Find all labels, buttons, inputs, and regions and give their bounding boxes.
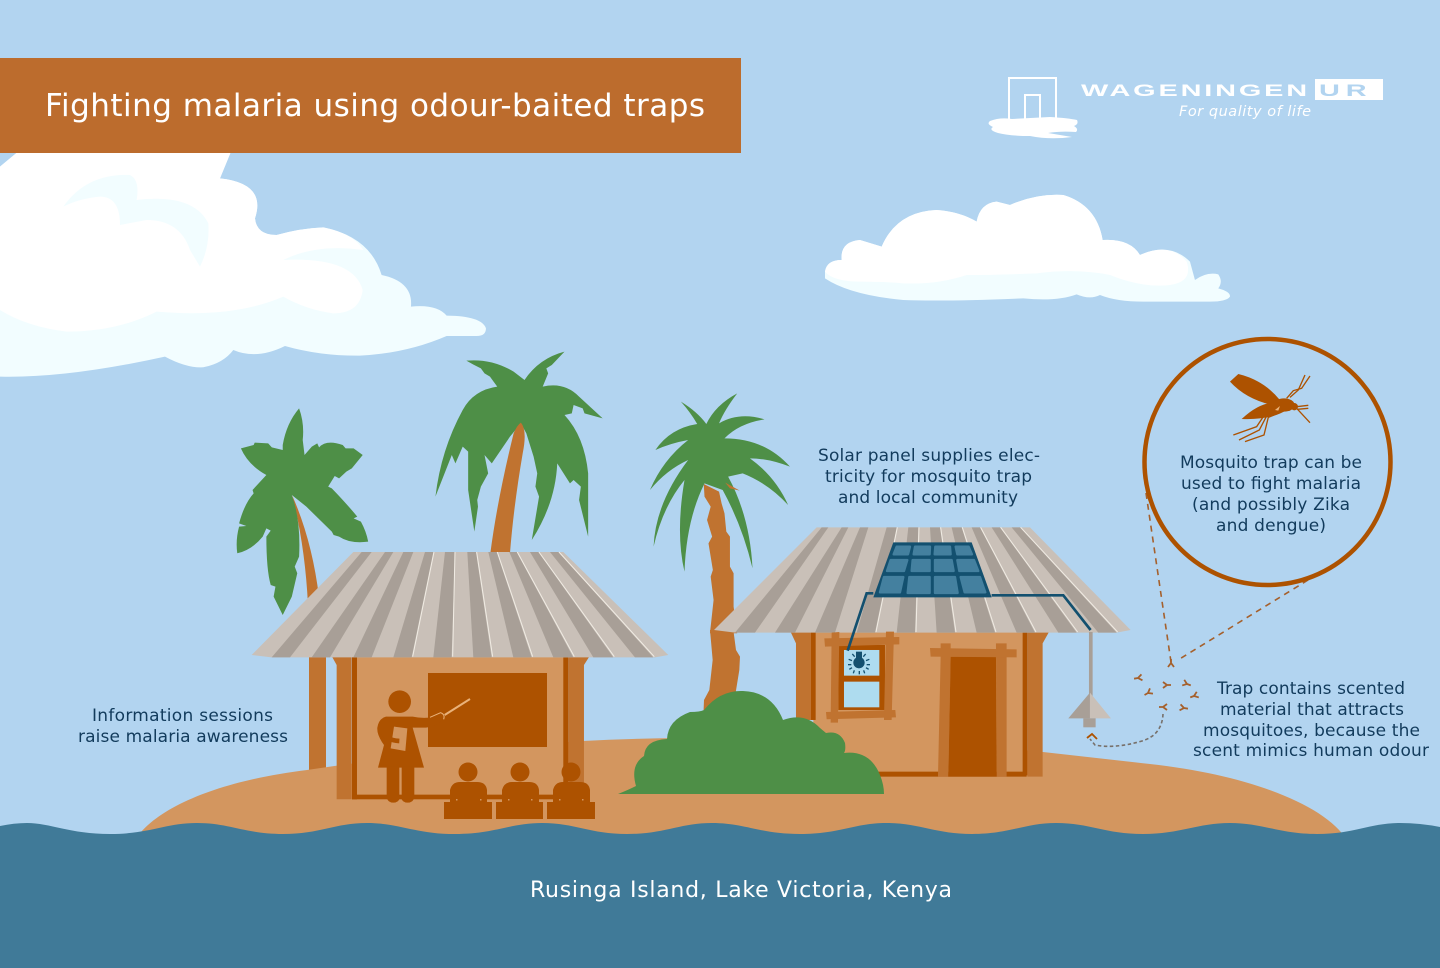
text: solar panel: [818, 446, 1040, 508]
teacher figure: [377, 690, 470, 803]
island: [135, 738, 1347, 840]
hut: solar house: [714, 527, 1131, 777]
text: solar panel: Solar panel supplies elec-: [818, 446, 1040, 466]
water: [0, 823, 1440, 968]
icon: mosquito: [1230, 374, 1310, 442]
palm tree: right: [650, 393, 790, 717]
text: mosquito trap use: [1180, 453, 1362, 536]
logo: Wageningen UR: UR: [1319, 82, 1367, 100]
text: information sessions: [78, 706, 288, 747]
door: [930, 643, 1017, 777]
logo: Wageningen UR: [989, 78, 1383, 138]
small mosquitoes and flight path: [1087, 659, 1199, 746]
blackboard: [428, 673, 547, 747]
logo: Wageningen UR: For quality of life: [1179, 104, 1311, 120]
classroom walls: [332, 656, 589, 799]
text: information sessions: raise malaria awareness: [78, 727, 288, 747]
cloud: right: [825, 195, 1230, 302]
text: trap description: mosquitoes, because the: [1203, 721, 1420, 741]
title banner: [0, 58, 741, 153]
dashed zoom lines to callout: [1146, 493, 1308, 662]
bush: [618, 691, 884, 794]
house walls: [791, 632, 1049, 777]
students: [444, 762, 595, 819]
wires from solar panel: [848, 593, 1091, 651]
text: trap description: [1193, 679, 1429, 761]
corrugated roof: solar house: [714, 527, 1131, 633]
logo: Wageningen UR: WAGENINGEN: [1081, 82, 1307, 100]
cloud: left: [0, 150, 486, 377]
hut: classroom: [252, 552, 668, 819]
window: [824, 632, 899, 723]
text: trap description: Trap contains scented: [1216, 679, 1405, 699]
icon: light bulb: [848, 652, 870, 674]
text: trap description: material that attracts: [1220, 700, 1404, 720]
text: mosquito trap use: used to fight malaria: [1181, 474, 1361, 494]
title banner: Fighting malaria using odour-baited traps: [45, 88, 705, 124]
text: mosquito trap use: Mosquito trap can be: [1180, 453, 1362, 473]
callout circle: mosquito: [1144, 339, 1390, 585]
text: solar panel: and local community: [838, 488, 1018, 508]
text: mosquito trap use: and dengue): [1216, 516, 1326, 536]
text: solar panel: tricity for mosquito trap: [825, 467, 1032, 487]
text: mosquito trap use: (and possibly Zika: [1192, 495, 1350, 515]
palm tree: middle: [435, 352, 603, 553]
location caption: Rusinga Island, Lake Victoria, Kenya: [530, 878, 952, 903]
palm tree: left: [237, 408, 368, 771]
corrugated roof: classroom: [252, 552, 668, 657]
text: information sessions: Information sessions: [92, 706, 273, 726]
text: trap description: scent mimics human odour: [1193, 741, 1429, 761]
mosquito trap: [1068, 632, 1111, 727]
solar panel: [873, 542, 992, 597]
